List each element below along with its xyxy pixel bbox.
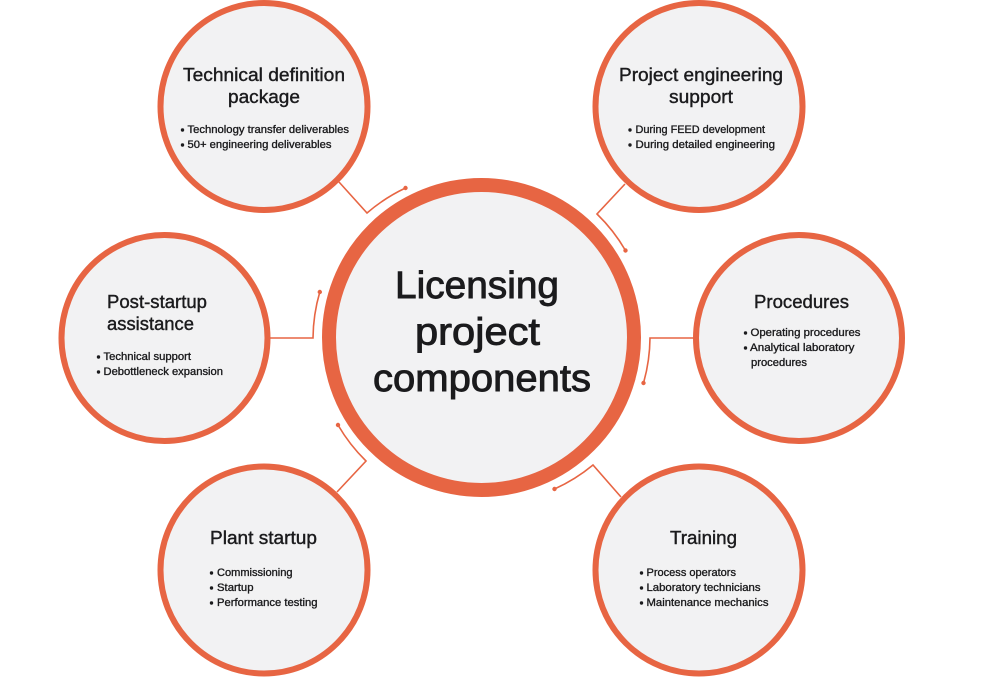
panel: plant startup: [160, 466, 368, 674]
bullet list: [181, 124, 350, 151]
heading: [107, 292, 207, 334]
bullet list: Technology transfer deliverables: [188, 124, 350, 136]
bullet list: [97, 351, 223, 378]
connector: training to center: [552, 465, 621, 497]
heading: Training: [670, 528, 737, 548]
bullet list: Operating procedures: [750, 327, 861, 339]
panel: project engineering support: [596, 3, 802, 210]
title: project: [415, 312, 540, 354]
heading: Procedures: [754, 292, 849, 312]
panel: center circle: [329, 185, 634, 490]
bullet list: 50+ engineering deliverables: [188, 139, 332, 151]
heading: [183, 65, 345, 107]
bullet list: [628, 124, 775, 151]
bullet list: Startup: [217, 582, 254, 594]
bullet list: Analytical laboratory: [750, 342, 855, 354]
heading: Post-startup: [107, 292, 207, 312]
bullet list: Laboratory technicians: [646, 582, 761, 594]
bullet list: [744, 327, 861, 369]
connector: plant startup to center: [336, 423, 366, 492]
bullet list: [640, 567, 769, 609]
title: Licensing: [395, 265, 559, 307]
panel: procedures: [696, 235, 902, 441]
bullet list: Technical support: [104, 351, 191, 363]
connector: project engineering support to center: [597, 184, 628, 253]
bullet list: Performance testing: [217, 597, 318, 609]
panel: post-startup assistance: [62, 235, 268, 441]
bullet list: Commissioning: [217, 567, 292, 579]
heading: package: [228, 87, 300, 107]
bullet list: During FEED development: [636, 124, 765, 136]
connector: technical definition package to center: [339, 182, 408, 213]
bullet list: Maintenance mechanics: [646, 597, 769, 609]
heading: Plant startup: [210, 528, 317, 548]
connector: procedures to center: [641, 338, 694, 385]
bullet list: Process operators: [646, 567, 736, 579]
bullet list: During detailed engineering: [636, 139, 775, 151]
heading: Technical definition: [183, 65, 345, 85]
panel: technical definition package: [160, 3, 368, 210]
heading: Project engineering: [619, 65, 783, 85]
heading: support: [669, 87, 733, 107]
bullet list: procedures: [751, 357, 807, 369]
connector: post-startup assistance to center: [270, 290, 322, 338]
bullet list: [210, 567, 318, 609]
bullet list: Debottleneck expansion: [104, 366, 223, 378]
heading: assistance: [107, 314, 194, 334]
title: [373, 265, 591, 400]
heading: [619, 65, 783, 107]
panel: training: [596, 466, 802, 674]
title: components: [373, 358, 591, 400]
